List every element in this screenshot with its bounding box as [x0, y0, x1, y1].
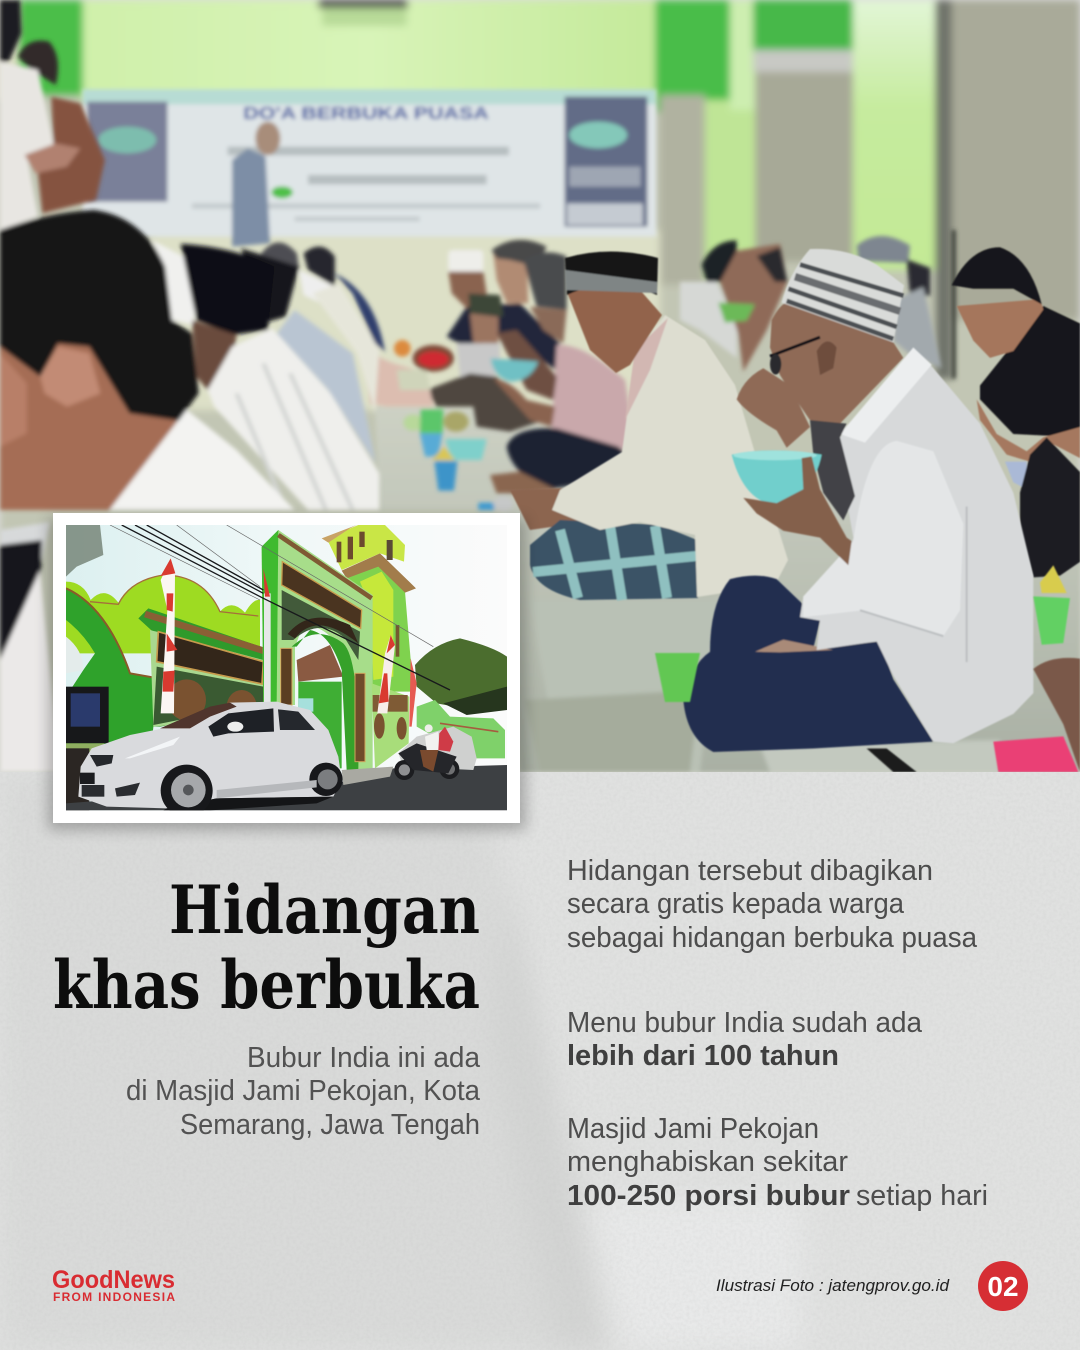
- fact: portions per day: Masjid Jami Pekojan: [567, 1113, 819, 1145]
- fact: more than 100 years: Menu bubur India sudah ada: [567, 1007, 923, 1039]
- fact: free meal: [567, 855, 978, 954]
- car: [78, 702, 342, 808]
- trees: [415, 638, 507, 710]
- fact: free meal: Hidangan tersebut dibagikan: [567, 855, 933, 887]
- fact: free meal: secara gratis kepada warga: [567, 888, 905, 920]
- paper textured background: [0, 772, 1080, 1350]
- subtitle: location of the mosque: [126, 1042, 481, 1141]
- sky: [66, 525, 426, 802]
- page number badge: [978, 1261, 1028, 1311]
- main gate: [262, 530, 373, 769]
- page number badge: 02: [987, 1271, 1019, 1302]
- logo: GoodNews from Indonesia: GoodNews: [52, 1266, 175, 1294]
- front gate wall with calligraphy: [138, 608, 271, 727]
- old man eating from a bowl: [683, 249, 1033, 752]
- banner: [83, 89, 656, 247]
- subtitle: location of the mosque: di Masjid Jami Pekojan, Kota: [126, 1075, 481, 1107]
- middle man in cream shirt and plaid sarong: [510, 252, 788, 600]
- banners: [161, 558, 175, 713]
- floor: [375, 405, 1080, 772]
- fact: free meal: sebagai hidangan berbuka puasa: [567, 922, 978, 954]
- subtitle: location of the mosque: Bubur India ini ada: [247, 1042, 481, 1074]
- main photo: men breaking the fast in the mosque: [0, 0, 1080, 772]
- inset photo shadow: [48, 518, 526, 830]
- minaret tower: [348, 566, 411, 692]
- fact: portions per day: menghabiskan sekitar: [567, 1146, 848, 1178]
- roof and green building behind gate: [297, 645, 343, 682]
- right gate panel: [372, 683, 409, 768]
- right man with black shirt: [952, 247, 1080, 577]
- photo credit: Ilustrasi Foto : jatengprov.go.id: [716, 1276, 950, 1295]
- fact: more than 100 years: lebih dari 100 tahun: [567, 1040, 839, 1072]
- banner: DO'A BERBUKA PUASA: [243, 104, 489, 123]
- dome and lime wall: [66, 575, 260, 653]
- inset photo: Masjid Jami Pekojan with white frame: [53, 513, 520, 823]
- fact: more than 100 years: [567, 1007, 923, 1072]
- power cables: [122, 525, 450, 690]
- signboard: [66, 687, 109, 743]
- second car and motorcycle: [398, 727, 477, 770]
- title: [53, 871, 480, 1024]
- fact: portions per day: 100-250 porsi bubur: [567, 1180, 850, 1212]
- title: khas berbuka: [53, 946, 480, 1024]
- cups and bowls on the floor: [655, 565, 1080, 772]
- left foreground men: [0, 0, 385, 772]
- subtitle: location of the mosque: Semarang, Jawa Tengah: [180, 1109, 480, 1141]
- road: [66, 765, 507, 810]
- fact: portions per day: [567, 1113, 988, 1212]
- men seated behind, right of centre: [680, 230, 956, 379]
- left arch: [66, 588, 158, 748]
- fact: portions per day: setiap hari: [856, 1180, 988, 1212]
- mosque wall and pillars: [0, 0, 1080, 772]
- logo: GoodNews from Indonesia: FROM INDONESIA: [53, 1290, 175, 1304]
- background crowd: [370, 240, 637, 511]
- title: Hidangan: [169, 871, 480, 949]
